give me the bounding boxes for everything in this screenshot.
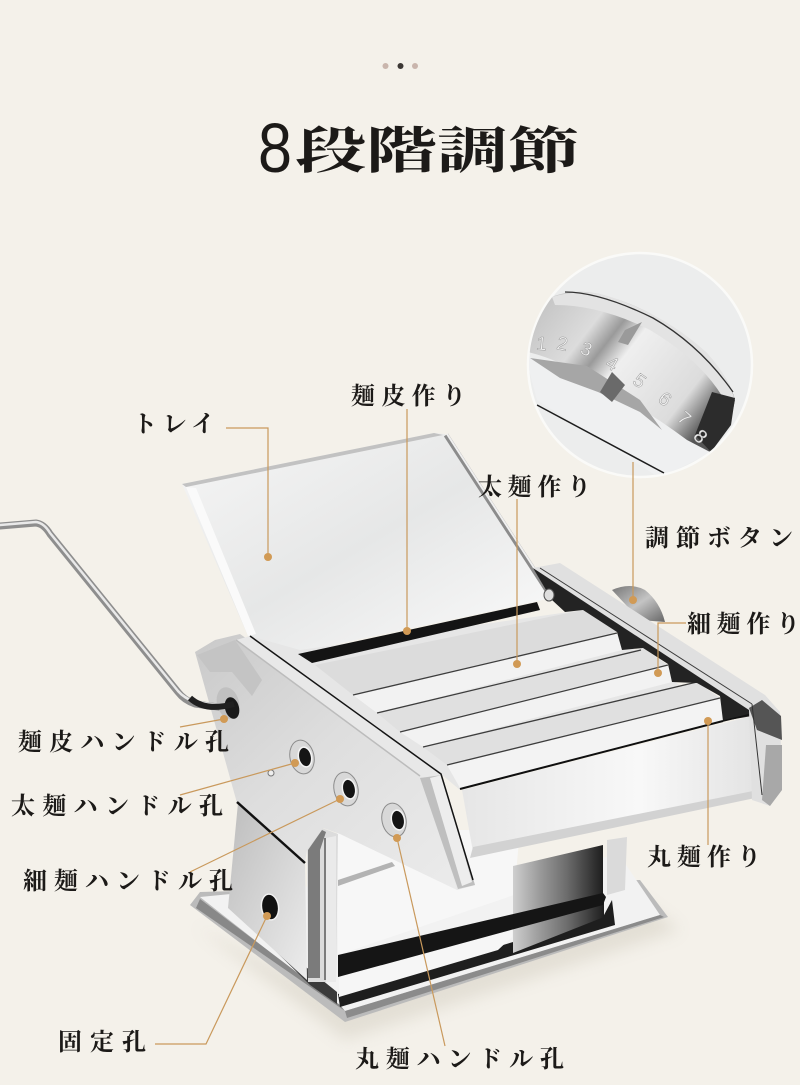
callout: round handle hole: 丸麺ハンドル孔: [355, 1046, 564, 1073]
callout: thin noodles: 細麺作り: [687, 611, 800, 638]
dial numbers 1 to 8: 2: [555, 333, 570, 356]
hole: fixing: [260, 893, 280, 921]
title: 8: [258, 109, 292, 187]
rollers top: [315, 610, 724, 788]
callout: sheet noodles: [351, 383, 466, 635]
front panel: [460, 714, 760, 858]
callout: thick noodles: 太麺作り: [478, 474, 591, 501]
callout: round noodles: [647, 717, 761, 871]
callout: round noodles: 丸麺作り: [647, 844, 761, 871]
callout: thin noodles: [654, 611, 800, 677]
inset circle: adjustment dial close-up: [525, 253, 752, 478]
callout: thick handle hole: 太麺ハンドル孔: [11, 793, 223, 820]
callout: sheet handle hole: [18, 715, 229, 756]
dial numbers 1 to 8: 3: [577, 338, 595, 362]
dial numbers 1 to 8: [537, 336, 708, 443]
callout: thin handle hole: 細麺ハンドル孔: [23, 868, 233, 895]
adjustment knob: [612, 586, 665, 622]
handle holes: [190, 685, 409, 839]
pasta machine: [0, 433, 782, 1040]
callout: thick noodles: [478, 474, 591, 668]
tray hinge: [544, 589, 554, 601]
tray: [182, 433, 553, 652]
dial numbers 1 to 8: 5: [629, 370, 650, 393]
dial numbers 1 to 8: 1: [535, 334, 548, 355]
callout: adjustment button: 調節ボタン: [645, 525, 793, 552]
callout: thick handle hole: [11, 759, 299, 820]
crank handle: [0, 522, 226, 708]
right dark interior: [533, 568, 755, 721]
base shadow: [195, 900, 680, 1040]
roller underlay: [250, 610, 724, 790]
callout: round handle hole: [355, 834, 564, 1073]
title: 段階調節: [295, 123, 579, 179]
right side band: [533, 563, 782, 806]
dial numbers 1 to 8: 4: [602, 352, 622, 376]
dial numbers 1 to 8: 8: [689, 426, 711, 448]
dial numbers 1 to 8: 6: [654, 388, 675, 411]
rear black slot: [298, 602, 540, 663]
title: [258, 109, 579, 187]
callout: fixing hole: [58, 912, 271, 1056]
callout: thin handle hole: [23, 795, 344, 895]
dial numbers 1 to 8: 7: [673, 408, 695, 430]
decorative three dots: [382, 63, 418, 69]
side plate: [195, 634, 475, 890]
callout: tray: [133, 412, 272, 561]
callout: tray: トレイ: [133, 412, 215, 438]
left leg plate: [228, 803, 338, 982]
right leg: [607, 837, 627, 895]
callout: fixing hole: 固定孔: [58, 1029, 146, 1056]
base plate: [190, 856, 668, 1022]
callout: sheet noodles: 麺皮作り: [351, 383, 466, 410]
callout: sheet handle hole: 麺皮ハンドル孔: [18, 729, 229, 756]
back panel and roller housing: [337, 830, 606, 997]
callout: adjustment button: [629, 462, 793, 604]
